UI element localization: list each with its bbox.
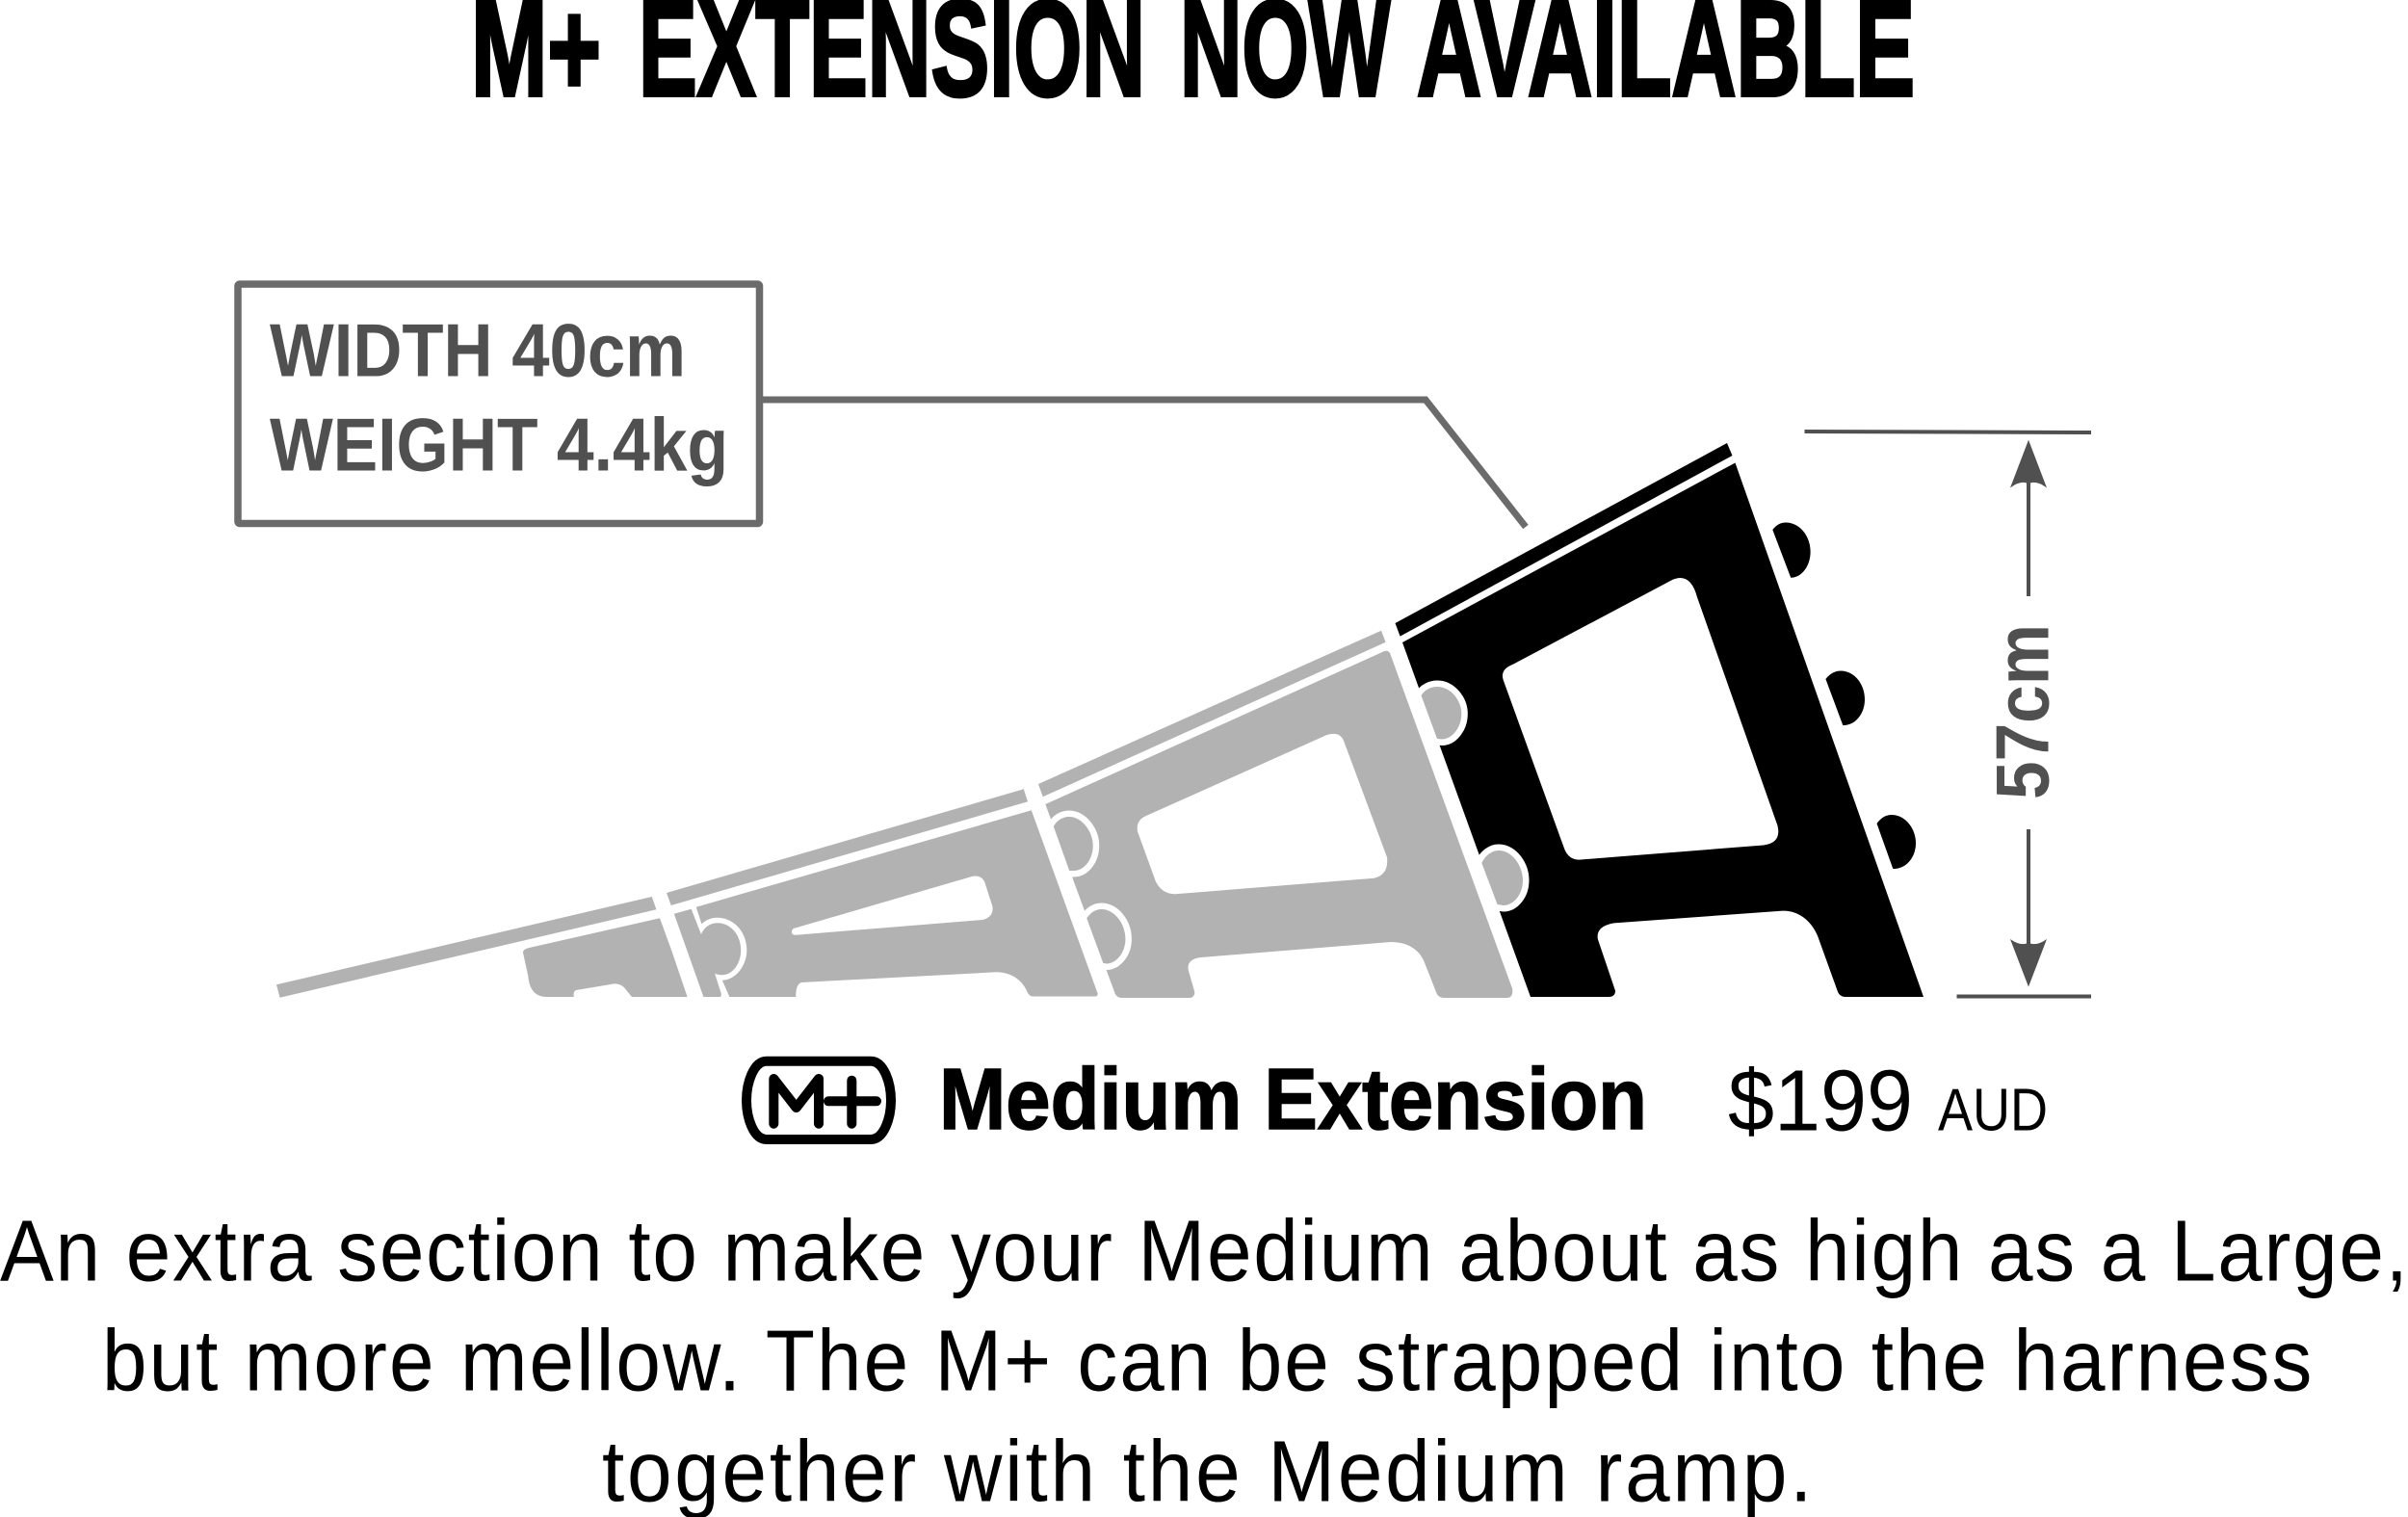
dimension label: 57cm — [1980, 624, 2065, 799]
callout: width and weight: WEIGHT 4.4kg — [270, 402, 728, 486]
arrow up — [2010, 440, 2047, 596]
title — [471, 0, 1915, 124]
description text: An extra section to make your Medium about as high as a Large, — [0, 1203, 2408, 1299]
description text: but more mellow. The M+ can be strapped into the harness — [102, 1313, 2312, 1409]
arrow down — [2010, 829, 2047, 986]
section: medium grey piece — [1038, 631, 1512, 998]
price — [1728, 1053, 2048, 1149]
description text — [0, 1203, 2408, 1517]
callout: width and weight — [238, 284, 759, 524]
ramp diagram — [276, 443, 1924, 998]
icon: M+ badge — [746, 1061, 891, 1139]
product name: Medium Extension — [939, 1052, 1647, 1148]
callout: width and weight: WIDTH 40cm — [270, 308, 686, 393]
section: small grey end piece — [276, 897, 688, 998]
grey joining buttons — [1422, 687, 1461, 740]
price: $199 — [1728, 1053, 1913, 1149]
strap buttons — [1772, 522, 1811, 578]
section: black M+ extension — [1395, 443, 1924, 997]
price: AUD — [1938, 1077, 2048, 1143]
dimension: 57cm height — [1805, 432, 2091, 996]
leader line from callout to extension — [761, 400, 1526, 527]
section: narrow grey piece — [667, 789, 1098, 997]
description text: together with the Medium ramp. — [602, 1424, 1812, 1517]
